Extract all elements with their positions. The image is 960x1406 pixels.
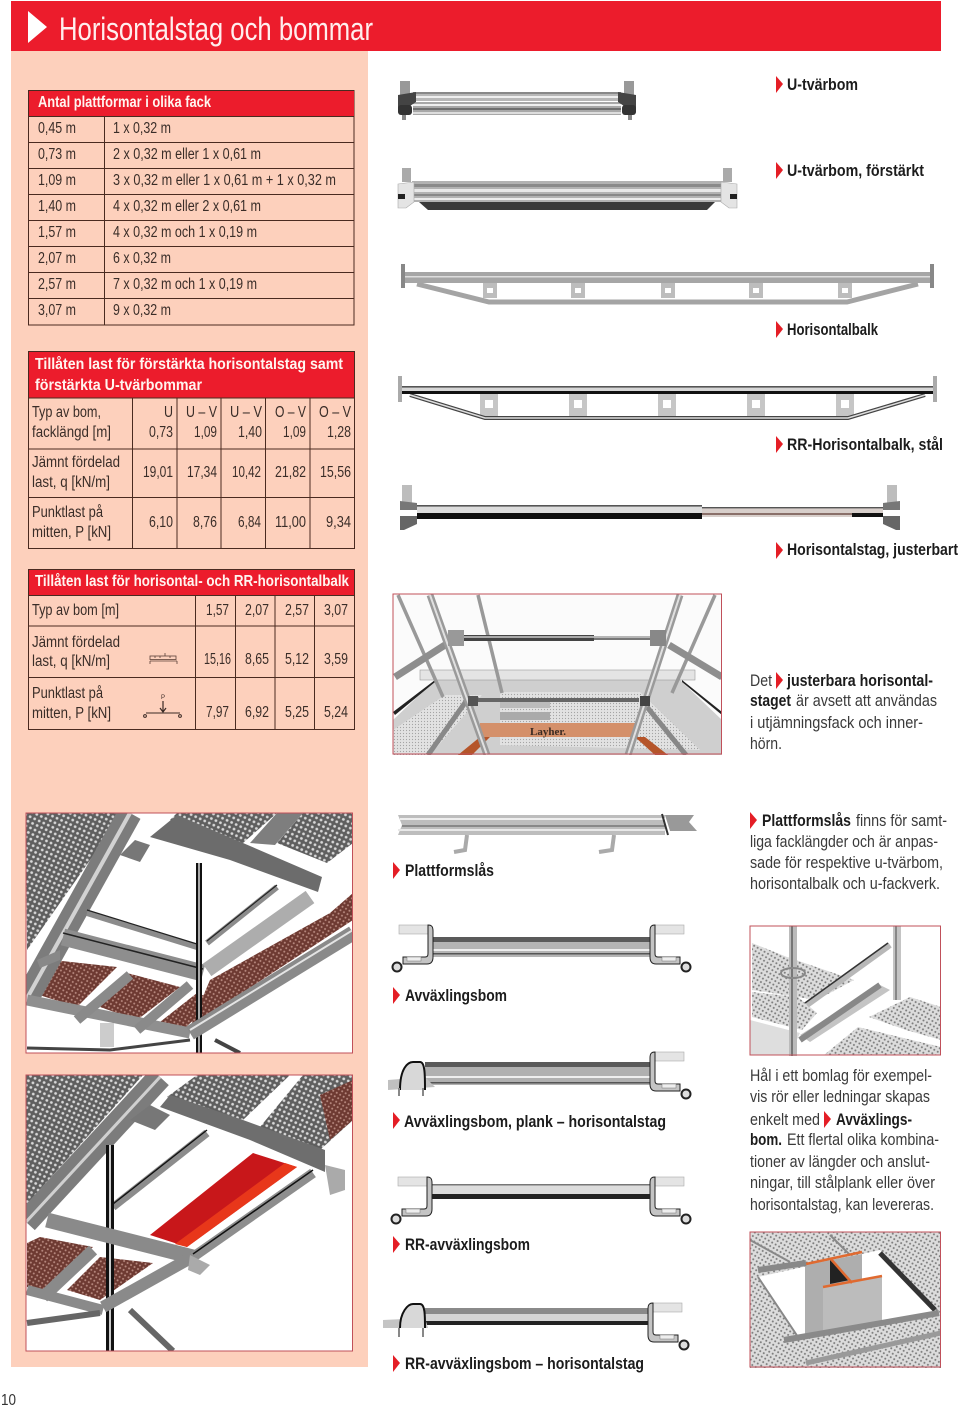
icon: point load: P [161, 695, 165, 701]
product image: avväxlingsbom [392, 925, 690, 972]
text block: plattformslås: finns för samt- [856, 812, 947, 830]
table: antal plattformar: 1 x 0,32 m [113, 120, 171, 137]
photo frame [750, 1232, 940, 1367]
table: antal plattformar: 1,40 m [38, 198, 76, 215]
label: RR-avväxlingsbom: RR-avväxlingsbom [405, 1236, 530, 1254]
table: antal plattformar: Antal plattformar i olika fack [38, 94, 211, 111]
photo: justerbart horisontalstag in bay [393, 594, 722, 755]
table: tillåten last förstärkta: Jämnt fördelad [32, 454, 120, 471]
label: Horisontalbalk: Horisontalbalk [787, 321, 879, 339]
text block: justerbara horisontalstaget: hörn. [750, 735, 782, 753]
table: antal plattformar: 2,07 m [38, 250, 76, 267]
table: antal plattformar: 6 x 0,32 m [113, 250, 171, 267]
photo: avväxlingsbom in platform [750, 926, 940, 1056]
table: antal plattformar: 0,45 m [38, 120, 76, 137]
table: tillåten last förstärkta: 6,10 [149, 514, 173, 531]
table: tillåten last horisontalbalk: 3,07 [324, 602, 348, 619]
table: antal plattformar: 7 x 0,32 m och 1 x 0,19 m [113, 276, 257, 293]
label: U-tvärbom: U-tvärbom [787, 76, 858, 94]
title: Horisontalstag och bommar [59, 11, 373, 47]
table: antal plattformar: 9 x 0,32 m [113, 302, 171, 319]
text block: plattformslås: Plattformslås [762, 812, 851, 830]
icon: distributed load [150, 653, 177, 664]
text block: justerbara horisontalstaget: justerbara horisontal- [786, 672, 933, 690]
product image: avväxlingsbom plank [388, 1052, 690, 1098]
table: antal plattformar: 0,73 m [38, 146, 76, 163]
table: tillåten last horisontalbalk: Jämnt fördelad [32, 634, 120, 651]
table: tillåten last förstärkta: Tillåten last för förstärkta horisontalstag samt [35, 356, 343, 373]
table: tillåten last horisontalbalk: 8,65 [245, 651, 269, 668]
table: tillåten last horisontalbalk: 2,57 [285, 602, 309, 619]
text block: justerbara horisontalstaget: i utjämningsfack och inner- [750, 714, 923, 732]
table: tillåten last horisontalbalk [28, 570, 354, 730]
table: tillåten last förstärkta: 0,73 [149, 424, 173, 441]
table: tillåten last förstärkta: U – V [186, 404, 218, 421]
table: tillåten last förstärkta: 1,40 [238, 424, 262, 441]
photo frame [750, 926, 940, 1055]
table: tillåten last horisontalbalk: Typ av bom [m] [32, 602, 119, 619]
table: tillåten last förstärkta: Typ av bom, [32, 404, 101, 421]
text block: hål i bomlag: vis rör eller ledningar skapas [750, 1088, 930, 1106]
title banner [11, 1, 941, 51]
text block: justerbara horisontalstaget: staget [750, 692, 791, 710]
table: tillåten last förstärkta: facklängd [m] [32, 424, 111, 441]
table: tillåten last horisontalbalk: last, q [kN/m] [32, 653, 110, 670]
text block: plattformslås [750, 812, 947, 893]
table: tillåten last horisontalbalk: 6,92 [245, 704, 269, 721]
table: tillåten last förstärkta: 8,76 [193, 514, 217, 531]
table: tillåten last förstärkta: förstärkta U-tvärbommar [35, 377, 202, 394]
product image: U-tvärbom förstärkt [398, 168, 737, 210]
photo frame [26, 813, 352, 1053]
table: antal plattformar: 3,07 m [38, 302, 76, 319]
table: antal plattformar: 1,09 m [38, 172, 76, 189]
table: tillåten last förstärkta: O – V [319, 404, 352, 421]
table: antal plattformar: 3 x 0,32 m eller 1 x 0,61 m + 1 x 0,32 m [113, 172, 336, 189]
text block: hål i bomlag: Ett flertal olika kombina- [787, 1131, 939, 1149]
table: tillåten last horisontalbalk: 15,16 [204, 651, 231, 668]
label: avväxlingsbom: Avväxlingsbom [405, 987, 507, 1005]
text block: hål i bomlag: Hål i ett bomlag för exempel- [750, 1067, 932, 1085]
label: U-tvärbom förstärkt: U-tvärbom, förstärkt [787, 162, 924, 180]
table: tillåten last horisontalbalk: 1,57 [206, 602, 229, 619]
table: tillåten last förstärkta: Punktlast på [32, 504, 103, 521]
text block: hål i bomlag [750, 1067, 939, 1214]
table: antal plattformar: 2,57 m [38, 276, 76, 293]
table: tillåten last horisontalbalk: Tillåten last för horisontal- och RR-horisontalbalk [35, 573, 349, 590]
icon: title arrow [28, 11, 47, 43]
table: tillåten last förstärkta: last, q [kN/m] [32, 474, 110, 491]
table: tillåten last horisontalbalk: 5,12 [285, 651, 309, 668]
table: tillåten last horisontalbalk: 5,25 [285, 704, 309, 721]
table: tillåten last förstärkta: 10,42 [232, 464, 261, 481]
text block: justerbara horisontalstaget: är avsett att användas [796, 692, 937, 710]
panel: peach background [11, 51, 368, 1367]
product image: RR-horisontalbalk [398, 376, 937, 418]
table: antal plattformar: 2 x 0,32 m eller 1 x 0,61 m [113, 146, 261, 163]
table: tillåten last förstärkta: 19,01 [143, 464, 173, 481]
table: tillåten last förstärkta: 6,84 [238, 514, 261, 531]
table: tillåten last horisontalbalk: mitten, P [kN] [32, 705, 111, 722]
table: tillåten last förstärkta: 1,09 [194, 424, 217, 441]
product image: horisontalbalk [401, 264, 934, 302]
photo frame [393, 594, 722, 754]
table: tillåten last förstärkta: mitten, P [kN] [32, 524, 111, 541]
table: tillåten last förstärkta: U [164, 404, 173, 421]
label: RR-avväxlingsbom horisontalstag: RR-avväxlingsbom – horisontalstag [405, 1355, 644, 1373]
table: tillåten last förstärkta: 11,00 [275, 514, 306, 531]
text block: hål i bomlag: horisontalstag, kan levereras. [750, 1196, 934, 1214]
text block: justerbara horisontalstaget [750, 672, 937, 753]
table: antal plattformar: 4 x 0,32 m och 1 x 0,19 m [113, 224, 257, 241]
table: antal plattformar: 4 x 0,32 m eller 2 x 0,61 m [113, 198, 261, 215]
icon: point load [144, 695, 181, 717]
table: tillåten last förstärkta: U – V [230, 404, 263, 421]
table: tillåten last horisontalbalk: Punktlast på [32, 685, 103, 702]
table: tillåten last förstärkta: 17,34 [187, 464, 217, 481]
product image: plattformslås [398, 814, 697, 852]
photo: platforms with red plank [26, 1076, 352, 1350]
photo: justerbart horisontalstag in bay: Layher. [530, 726, 566, 738]
photo: avväxlingsbom opening [750, 1232, 941, 1368]
table: tillåten last förstärkta: 1,09 [283, 424, 306, 441]
table: antal plattformar: 1,57 m [38, 224, 76, 241]
text block: justerbara horisontalstaget: Det [750, 672, 772, 690]
table: tillåten last förstärkta: O – V [275, 404, 307, 421]
text block: hål i bomlag: tioner av längder och anslut- [750, 1153, 930, 1171]
product image: U-tvärbom [398, 81, 636, 120]
table: tillåten last horisontalbalk: 7,97 [206, 704, 229, 721]
photo: platforms from below [26, 814, 352, 1052]
product image: RR-avväxlingsbom horisontalstag [383, 1303, 688, 1350]
table: tillåten last horisontalbalk: 5,24 [324, 704, 348, 721]
table: tillåten last förstärkta [28, 352, 354, 549]
table: tillåten last förstärkta: 15,56 [320, 464, 351, 481]
text block: hål i bomlag: ningar, till stålplank eller över [750, 1174, 935, 1192]
table: tillåten last förstärkta: 21,82 [275, 464, 306, 481]
photo frame [26, 1075, 352, 1351]
table: tillåten last horisontalbalk: 3,59 [324, 651, 348, 668]
table: tillåten last förstärkta: 9,34 [326, 514, 351, 531]
text block: hål i bomlag: enkelt med [750, 1111, 820, 1129]
table: tillåten last horisontalbalk: 2,07 [245, 602, 269, 619]
table: tillåten last förstärkta: 1,28 [327, 424, 351, 441]
label: avväxlingsbom plank: Avväxlingsbom, plank – horisontalstag [404, 1113, 666, 1131]
table: antal plattformar [28, 90, 354, 325]
product image: horisontalstag justerbart [400, 485, 900, 530]
label: plattformslås: Plattformslås [405, 862, 494, 880]
text block: hål i bomlag: bom. [750, 1131, 782, 1149]
text block: hål i bomlag: Avväxlings- [836, 1111, 912, 1129]
product image: RR-avväxlingsbom [392, 1177, 690, 1224]
